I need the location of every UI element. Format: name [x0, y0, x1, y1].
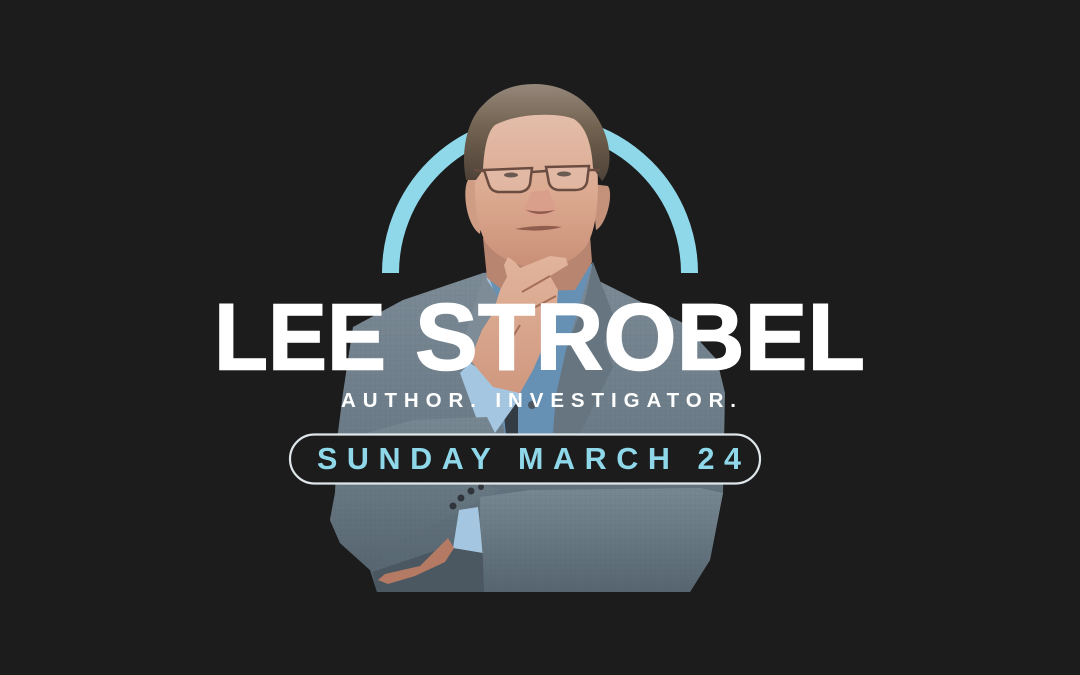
finger lines [505, 276, 556, 350]
button [528, 401, 536, 409]
left lapel [462, 275, 500, 362]
sleeve buttons [450, 484, 484, 510]
neck [483, 235, 592, 292]
folded forearm [480, 488, 723, 592]
head [475, 108, 598, 268]
jacket [330, 260, 725, 592]
portrait of man in grey suit [330, 84, 725, 592]
ears [465, 180, 486, 234]
blue arc [390, 124, 690, 273]
mouth [515, 226, 562, 231]
title: STROBEL [415, 284, 865, 390]
date pill [290, 434, 760, 484]
hand on chin [470, 256, 568, 393]
glasses [474, 166, 600, 192]
date text: SUNDAY MARCH 24 [317, 442, 741, 476]
eyes [504, 172, 571, 178]
hair [464, 84, 610, 181]
shirt [484, 262, 593, 435]
tie [501, 383, 518, 435]
title [214, 284, 865, 390]
lower body shadow [372, 545, 484, 592]
lower hand [378, 538, 454, 584]
subtitle: AUTHOR. INVESTIGATOR. [341, 389, 736, 412]
right lapel [553, 262, 617, 433]
left sleeve [330, 417, 500, 570]
nose [524, 190, 556, 216]
shirt cuff at wrist [460, 363, 522, 433]
lower shirt cuff [453, 507, 483, 553]
title: LEE [214, 284, 386, 390]
